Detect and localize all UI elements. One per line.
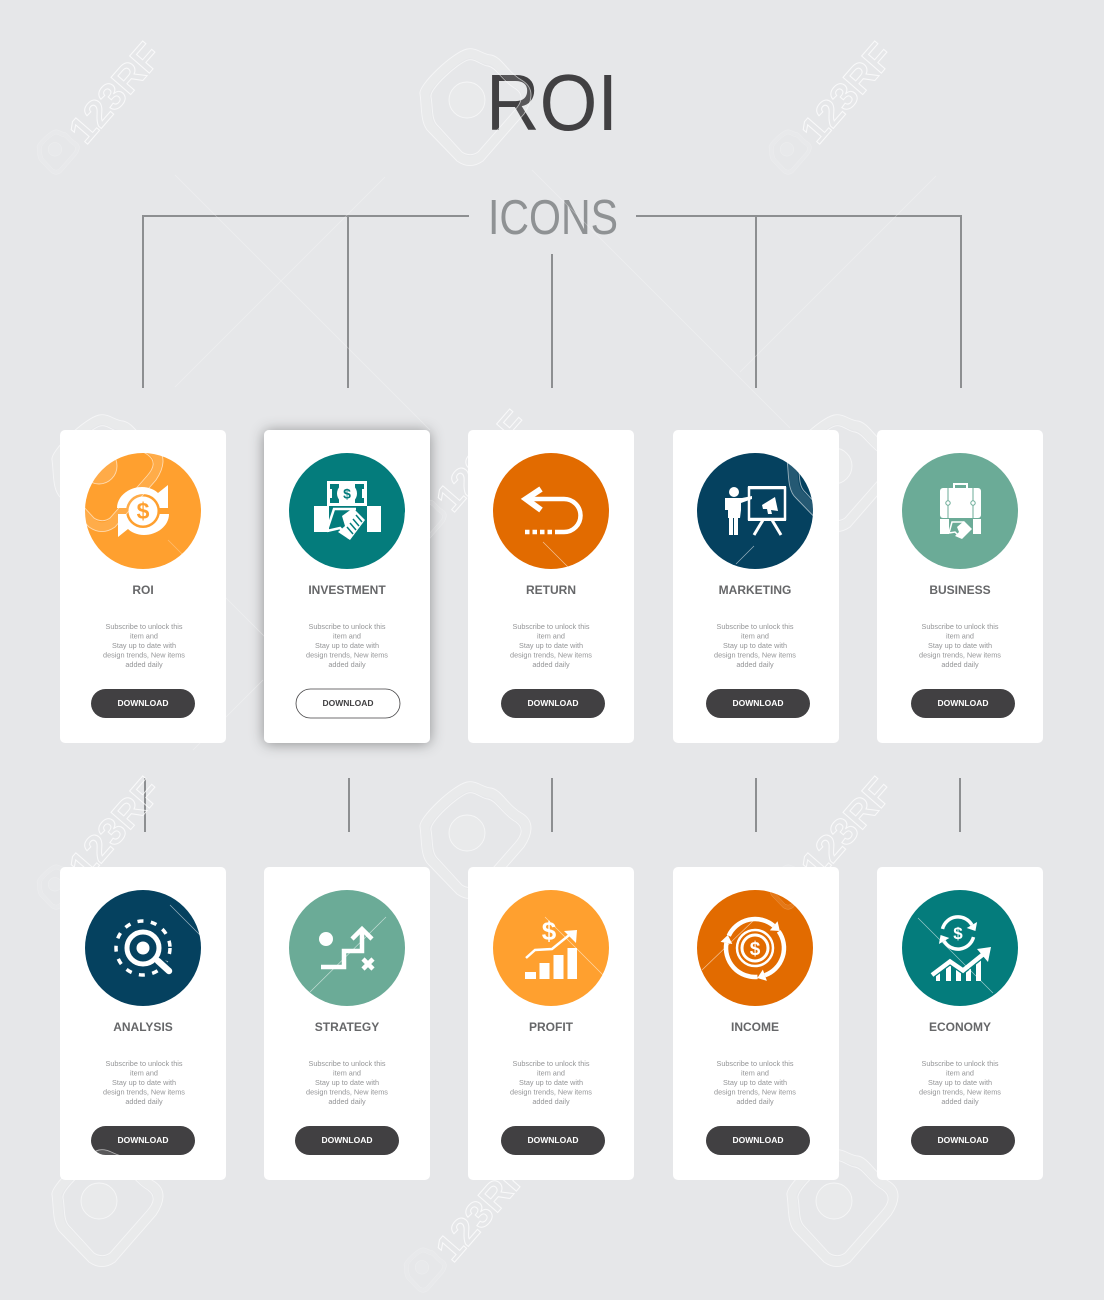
- card background: [877, 867, 1043, 1180]
- icon: profit bars and dollar: [493, 890, 609, 1006]
- body text: added daily: [125, 1097, 163, 1106]
- download button: DOWNLOAD: [732, 1135, 784, 1145]
- icon: economy chart and exchange: $: [953, 924, 963, 943]
- body text: design trends, New items: [510, 650, 592, 660]
- body text: Stay up to date with: [112, 641, 176, 650]
- download button: [501, 689, 605, 718]
- body text: Subscribe to unlock this: [105, 622, 183, 631]
- body text: added daily: [328, 660, 366, 669]
- panel: ROI: [60, 430, 226, 743]
- download button: [295, 1126, 399, 1155]
- body text: Subscribe to unlock this: [716, 622, 794, 631]
- card background: [264, 430, 430, 743]
- body text: added daily: [532, 1097, 570, 1106]
- download button (outline): [296, 689, 400, 718]
- panel: Investment (highlighted): [264, 430, 430, 743]
- download button: [91, 1126, 195, 1155]
- body text: design trends, New items: [919, 1088, 1001, 1096]
- body text: item and: [946, 632, 974, 640]
- icon: ROI exchange arrows and dollar: [85, 453, 201, 569]
- card background: [60, 430, 226, 743]
- heading: BUSINESS: [929, 583, 991, 597]
- body text: Subscribe to unlock this: [105, 1059, 183, 1068]
- body text: Stay up to date with: [723, 1078, 787, 1087]
- body text: item and: [741, 1068, 769, 1078]
- body text: design trends, New items: [103, 1088, 185, 1096]
- download button (outline): DOWNLOAD: [322, 698, 374, 708]
- body text: item and: [537, 632, 565, 640]
- body text: design trends, New items: [919, 650, 1001, 660]
- panel: Strategy: [264, 867, 430, 1180]
- card background: [264, 867, 430, 1180]
- body text: Subscribe to unlock this: [512, 622, 590, 631]
- body text: design trends, New items: [714, 1088, 796, 1096]
- icon: profit bars and dollar: $: [542, 916, 557, 946]
- icon: income cycle with coin: $: [750, 939, 761, 960]
- heading: ECONOMY: [929, 1020, 991, 1034]
- body text: design trends, New items: [510, 1088, 592, 1096]
- watermark: 123RF logos: 123RF: [428, 403, 537, 520]
- body text: Subscribe to unlock this: [308, 1059, 386, 1068]
- download button: [91, 689, 195, 718]
- watermark: 123RF logos: 123RF: [793, 35, 902, 152]
- body text: Stay up to date with: [928, 1078, 992, 1087]
- card background: [877, 430, 1043, 743]
- heading: MARKETING: [719, 583, 791, 597]
- body text: Subscribe to unlock this: [921, 622, 999, 631]
- connector lines: top tree: [143, 216, 961, 388]
- body text: item and: [741, 632, 769, 640]
- body text: Stay up to date with: [928, 641, 992, 650]
- title: ROI: [486, 58, 618, 147]
- download button: [911, 1126, 1015, 1155]
- body text: item and: [946, 1068, 974, 1078]
- download button: [706, 1126, 810, 1155]
- icon: strategy stairs: [289, 890, 405, 1006]
- icon: presenter with board and megaphone: [697, 453, 813, 569]
- card background: [673, 430, 839, 743]
- download button: DOWNLOAD: [938, 1135, 988, 1145]
- body text: Subscribe to unlock this: [512, 1059, 590, 1068]
- body text: design trends, New items: [306, 1088, 388, 1096]
- panel: Economy: [877, 867, 1043, 1180]
- body text: Subscribe to unlock this: [716, 1059, 794, 1068]
- body text: design trends, New items: [306, 650, 388, 660]
- panel: Income: [673, 867, 839, 1180]
- icon: magnifier with dashed ring: [85, 890, 201, 1006]
- body text: Subscribe to unlock this: [308, 622, 386, 631]
- icon: return arrow: [493, 453, 609, 569]
- heading: INCOME: [731, 1020, 779, 1034]
- download button: DOWNLOAD: [322, 1135, 372, 1145]
- body text: added daily: [328, 1097, 366, 1106]
- watermark: 123RF logos: 123RF: [793, 770, 902, 887]
- watermark: hairlines over icon circles: [170, 542, 993, 993]
- icon: economy chart and exchange: [902, 890, 1018, 1006]
- watermark: 123RF logos: [37, 35, 902, 1292]
- download button: DOWNLOAD: [732, 698, 784, 708]
- body text: design trends, New items: [714, 650, 796, 660]
- icon: briefcase and handshake: [902, 453, 1018, 569]
- download button: [706, 689, 810, 718]
- card background: [673, 867, 839, 1180]
- body text: added daily: [941, 660, 979, 669]
- card background: [468, 430, 634, 743]
- connector lines: between rows: [145, 778, 960, 832]
- body text: added daily: [736, 1097, 774, 1106]
- watermark: large egg marks: [52, 49, 898, 1267]
- icon: income cycle with coin: [697, 890, 813, 1006]
- heading: ROI: [132, 583, 154, 597]
- watermark: 123RF logos: 123RF: [61, 770, 170, 887]
- body text: Stay up to date with: [112, 1078, 176, 1087]
- panel: Analysis: [60, 867, 226, 1180]
- icon: investment handshake and banknote: [289, 453, 405, 569]
- body text: item and: [130, 632, 158, 640]
- panel: Business: [877, 430, 1043, 743]
- subtitle: ICONS: [488, 191, 618, 245]
- watermark: 123RF logos: 123RF: [428, 1153, 537, 1270]
- download button: DOWNLOAD: [528, 1135, 578, 1145]
- download button: DOWNLOAD: [118, 1135, 168, 1145]
- download button: DOWNLOAD: [118, 698, 168, 708]
- body text: item and: [333, 632, 361, 640]
- body text: added daily: [125, 660, 163, 669]
- download button: DOWNLOAD: [938, 698, 988, 708]
- body text: item and: [130, 1068, 158, 1078]
- icon: ROI exchange arrows and dollar: $: [137, 498, 150, 524]
- body text: Stay up to date with: [723, 641, 787, 650]
- watermark: hairlines over background: [168, 170, 936, 750]
- body text: Stay up to date with: [519, 641, 583, 650]
- heading: ANALYSIS: [113, 1020, 173, 1034]
- body text: Stay up to date with: [315, 1078, 379, 1087]
- panel: Marketing: [673, 430, 839, 743]
- body text: item and: [333, 1068, 361, 1078]
- download button: DOWNLOAD: [528, 698, 578, 708]
- card background: [60, 867, 226, 1180]
- download button: [911, 689, 1015, 718]
- heading: PROFIT: [529, 1020, 574, 1034]
- body text: item and: [537, 1068, 565, 1078]
- icon: investment handshake and banknote: $: [343, 486, 351, 502]
- body text: Stay up to date with: [315, 641, 379, 650]
- body text: added daily: [941, 1097, 979, 1106]
- heading: RETURN: [526, 583, 576, 597]
- panel: Return: [468, 430, 634, 743]
- heading: INVESTMENT: [308, 583, 386, 597]
- heading: STRATEGY: [315, 1020, 379, 1034]
- body text: Stay up to date with: [519, 1078, 583, 1087]
- panel: Profit: [468, 867, 634, 1180]
- body text: added daily: [532, 660, 570, 669]
- watermark: 123RF logos: 123RF: [61, 35, 170, 152]
- body text: design trends, New items: [103, 650, 185, 660]
- body text: added daily: [736, 660, 774, 669]
- card background: [468, 867, 634, 1180]
- body text: Subscribe to unlock this: [921, 1059, 999, 1068]
- download button: [501, 1126, 605, 1155]
